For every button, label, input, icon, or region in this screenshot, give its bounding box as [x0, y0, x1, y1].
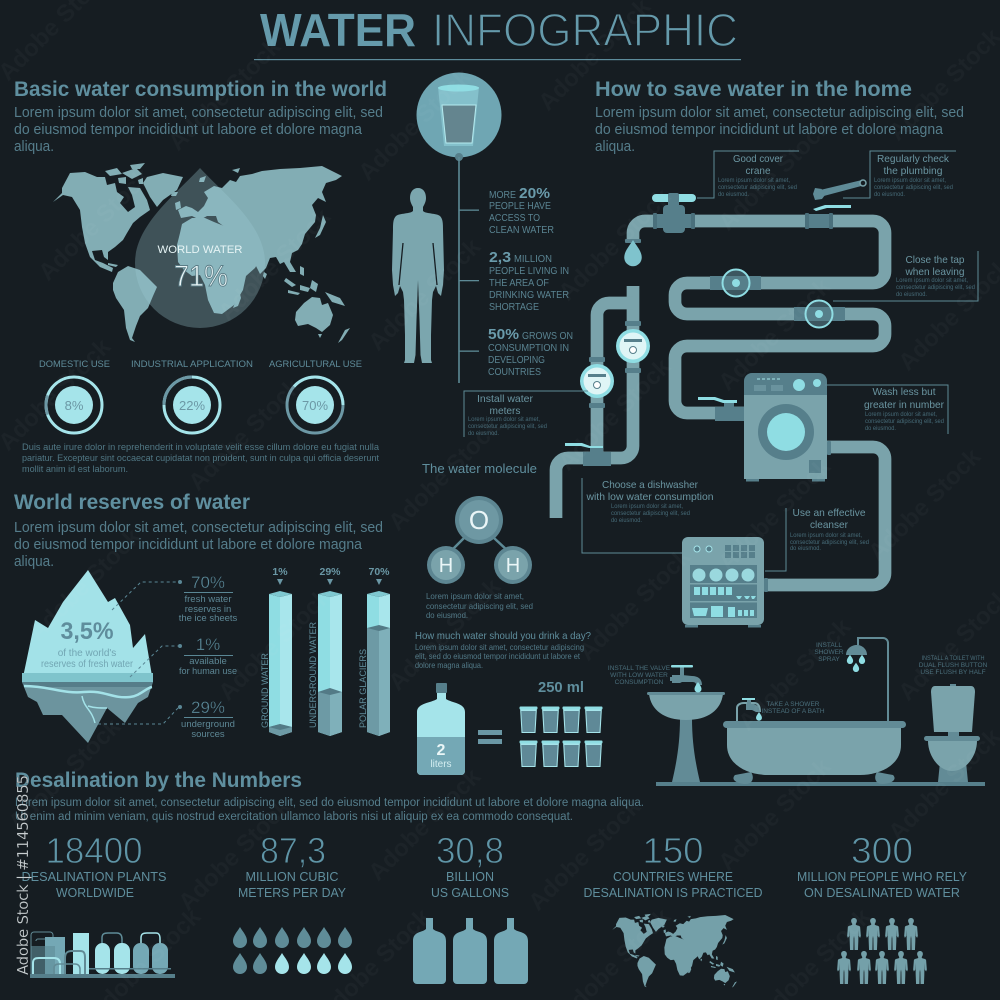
watermark: stock pattern: Adobe Stock [733, 613, 857, 736]
text block: world reserves intro: Lorem ipsum dolor sit amet, consectetur adipiscing elit, sed [14, 519, 383, 536]
icon: water drop from tap [624, 240, 642, 266]
stat: 87,3 million cubic: METERS PER DAY [238, 885, 346, 900]
icon: lower left valve [565, 443, 611, 466]
text: install shower spray: SPRAY [818, 656, 840, 663]
stat: more 20%: ACCESS TO [489, 213, 540, 224]
icon: desalination plant [30, 932, 175, 978]
text: install toilet [919, 655, 988, 676]
callout: use effective cleanser: do eiusmod. [790, 545, 821, 552]
callout: choose dishwasher: Lorem ipsum dolor sit amet, [611, 503, 683, 510]
stat: 2,3 million [489, 249, 569, 313]
gauge: domestic 8% [46, 377, 102, 433]
stat: 50% grows: COUNTRIES [488, 367, 541, 378]
text block: desalination intro [15, 797, 644, 823]
stat: 87,3 million cubic: MILLION CUBIC [246, 869, 338, 884]
stat: 70% ice sheets: reserves in [185, 604, 231, 615]
watermark: stock pattern: Adobe Stock [183, 373, 307, 496]
text block: molecule [426, 591, 533, 620]
watermark: stock pattern: Adobe Stock [3, 713, 127, 836]
watermark: stock pattern: Adobe Stock [23, 523, 147, 646]
world map with water drop [53, 163, 350, 343]
stat: 2,3 million: SHORTAGE [489, 302, 539, 313]
text: take a shower: INSTEAD OF A BATH [761, 708, 825, 715]
callout: good cover crane: do eiusmod. [718, 191, 749, 198]
stat: 18400 plants: 18400 [46, 830, 142, 871]
stat: 150 countries: 150 [642, 830, 704, 871]
watermark: stock pattern: Adobe Stock [163, 33, 287, 156]
icon: 2 liters bottle: liters [430, 759, 452, 770]
watermark: stock pattern: Adobe Stock [363, 763, 487, 886]
text block: duis aute [22, 442, 380, 475]
stat: 1% human use [179, 635, 237, 677]
stat: 2,3 million: 2,3 [489, 249, 511, 266]
heading: water molecule: The water molecule [422, 461, 537, 476]
text block: world reserves intro: do eiusmod tempor incididunt ut labore et dolore magna [14, 536, 363, 553]
watermark: stock pattern: Adobe Stock [383, 413, 507, 536]
icon: 2 liters bottle: 2 [437, 742, 446, 759]
stat: 70% ice sheets [179, 573, 238, 624]
watermark: stock pattern: Adobe Stock [713, 113, 837, 236]
stat: 300 million people: ON DESALINATED WATER [804, 885, 960, 900]
text block: molecule: Lorem ipsum dolor sit amet, [426, 591, 524, 601]
bar: polar glaciers: POLAR GLACIERS [358, 649, 369, 728]
text block: save water intro [595, 104, 964, 155]
callout: wash less [825, 385, 948, 434]
bathroom: floor [656, 782, 985, 786]
callout: regularly check plumbing: the plumbing [884, 165, 943, 177]
bar: ground water: 1% [272, 566, 288, 578]
icon: dishwasher [682, 537, 768, 628]
icon: small world map [612, 914, 737, 988]
stat: 18400 plants: DESALINATION PLANTS [22, 869, 167, 884]
stat: 2,3 million: DRINKING WATER [489, 290, 569, 301]
text block: basic water intro [14, 104, 383, 155]
text block: basic water intro: do eiusmod tempor incididunt ut labore et dolore magna [14, 121, 363, 138]
text: install shower spray: SHOWER [814, 649, 844, 656]
callout: close the tap: when leaving [905, 266, 965, 278]
callout: choose dishwasher: Choose a dishwasher [602, 479, 698, 491]
stat: more 20%: CLEAN WATER [489, 225, 554, 236]
stat: 150 countries [584, 830, 762, 900]
stat: 87,3 million cubic [238, 830, 346, 900]
icon: crane valve [652, 193, 696, 233]
text: install valve: CONSUMPTION [615, 679, 664, 686]
callout: good cover crane: crane [746, 165, 771, 177]
callout: regularly check plumbing: Regularly check [877, 153, 950, 165]
callout: wash less: Wash less but [872, 386, 936, 398]
icon: water meter upper [616, 321, 650, 373]
callout: good cover crane: Good cover [733, 153, 783, 165]
callout: install water meters: consectetur adipiscing elit, sed [468, 423, 547, 430]
icon: twelve drops [233, 927, 352, 974]
title [254, 4, 741, 60]
callout: regularly check plumbing: do eiusmod. [874, 191, 905, 198]
bar: ground water [260, 566, 292, 736]
stat: 150 countries: COUNTRIES WHERE [613, 869, 733, 884]
stat: 50% grows: CONSUMPTION IN [488, 343, 569, 354]
text block: how much water: Lorem ipsum dolor sit amet, consectetur adipiscing [415, 642, 584, 652]
icon: people group [837, 918, 927, 984]
text block: molecule: do eiusmod. [426, 610, 468, 620]
callout: close the tap: Close the tap [906, 254, 965, 266]
iceberg: 3,5% [60, 618, 114, 645]
icon: bathtub with shower [723, 638, 906, 784]
text: install valve [608, 665, 671, 686]
stat: more 20%: MORE [489, 190, 516, 201]
callout: wash less: do eiusmod. [865, 425, 896, 432]
pipe system: meter branch [556, 286, 633, 518]
stat: 87,3 million cubic: 87,3 [260, 830, 326, 871]
diagram: water molecule: H [439, 555, 453, 577]
text: take a shower [761, 701, 825, 715]
watermark: stock pattern: Adobe Stock [573, 543, 697, 666]
text: install shower spray: INSTALL [816, 642, 842, 649]
gauge: industrial 22% [164, 377, 220, 433]
stat: 29% underground: 29% [191, 698, 225, 717]
icon: eight glasses [520, 706, 602, 767]
stat: 70% ice sheets: fresh water [184, 594, 232, 605]
watermark: stock pattern: Adobe Stock [713, 453, 837, 576]
watermark: stock pattern: Adobe Stock [363, 233, 487, 356]
heading: basic water consumption: Basic water consumption in the world [14, 78, 387, 101]
callout: choose dishwasher: do eiusmod. [611, 517, 642, 524]
text: install shower spray [814, 642, 844, 663]
bar: underground water: UNDERGROUND WATER [308, 622, 319, 728]
stat: 300 million people [797, 830, 967, 900]
stat: more 20% [489, 185, 554, 236]
text: install toilet: USE FLUSH BY HALF [920, 669, 986, 676]
callout: install water meters: do eiusmod. [468, 430, 499, 437]
callout: use effective cleanser: cleanser [810, 519, 848, 531]
callout: close the tap [833, 251, 978, 301]
gauge: industrial 22%: 22% [179, 398, 205, 413]
text block: world reserves intro [14, 519, 383, 570]
stat: 18400 plants [22, 830, 167, 900]
text block: duis aute: mollit anim id est laborum. [22, 464, 128, 475]
iceberg: of the world's [58, 648, 116, 659]
world map with water drop: 71% [174, 260, 228, 293]
callout: regularly check plumbing: consectetur adipiscing elit, sed [874, 184, 953, 191]
stat: 2,3 million: THE AREA OF [489, 278, 549, 289]
gauge: agricultural 70%: 70% [302, 398, 328, 413]
icon: water meter lower [580, 357, 614, 408]
stat: 29% underground: underground [181, 719, 235, 730]
callout: use effective cleanser: Use an effective [792, 507, 866, 519]
heading: desalination: Desalination by the Numbers [15, 769, 302, 792]
callout: install water meters: Lorem ipsum dolor sit amet, [468, 416, 540, 423]
icon: washing machine [744, 373, 831, 482]
pipe system: main run [625, 221, 885, 585]
world map with water drop: WORLD WATER [158, 244, 243, 256]
iceberg: reserves of fresh water [41, 659, 134, 670]
stat: more 20%: PEOPLE HAVE [489, 201, 551, 212]
stat: 70% ice sheets: 70% [191, 573, 225, 592]
gauge: domestic 8%: 8% [65, 398, 84, 413]
diagram: water molecule [427, 496, 532, 584]
stat: 1% human use: 1% [196, 635, 220, 654]
watermark: stock pattern: Adobe Stock [353, 63, 477, 186]
watermark: stock pattern: Adobe Stock [33, 163, 157, 286]
callout: close the tap: Lorem ipsum dolor sit amet, [896, 277, 968, 284]
text: install valve: INSTALL THE VALVE [608, 665, 671, 672]
title: WATER [260, 4, 416, 56]
callout: choose dishwasher: with low water consumption [586, 491, 714, 503]
text: install toilet: INSTALL A TOILET WITH [922, 655, 985, 662]
watermark: stock pattern: Adobe Stock [553, 183, 677, 306]
text block: desalination intro: Ut enim ad minim veniam, quis nostrud exercitation ullamco laboris nisi ut aliquip ex ea commodo consequat. [15, 811, 573, 823]
watermark: stock pattern: Adobe Stock [713, 753, 837, 876]
bar: underground water: 29% [319, 566, 341, 578]
callout: use effective cleanser: Lorem ipsum dolor sit amet, [790, 532, 862, 539]
text block: save water intro: do eiusmod tempor incididunt ut labore et dolore magna [595, 121, 944, 138]
usage gauge labels: AGRICULTURAL USE [269, 359, 362, 370]
label: 250 ml: 250 ml [538, 679, 584, 696]
stat: 300 million people: MILLION PEOPLE WHO RELY [797, 869, 967, 884]
heading: how much water: How much water should you drink a day? [415, 630, 591, 642]
text block: basic water intro: Lorem ipsum dolor sit amet, consectetur adipiscing elit, sed [14, 104, 383, 121]
heading: world reserves: World reserves of water [14, 491, 250, 514]
stat: 50% grows: GROWS ON [522, 331, 573, 342]
callout: good cover crane: Lorem ipsum dolor sit amet, [718, 177, 790, 184]
stat: 30,8 billion: 30,8 [436, 830, 504, 871]
stat: 70% ice sheets: the ice sheets [179, 613, 238, 624]
text: take a shower: TAKE A SHOWER [767, 701, 820, 708]
callout: close the tap: consectetur adipiscing elit, sed [896, 284, 975, 291]
stat: 50% grows [488, 326, 573, 378]
callout: install water meters: Install water [477, 393, 533, 405]
gauge: agricultural 70% [287, 377, 343, 433]
usage gauge labels: INDUSTRIAL APPLICATION [131, 359, 253, 370]
text block: duis aute: Duis aute irure dolor in reprehenderit in voluptate velit esse cillum dolore eu fugiat nulla [22, 442, 380, 453]
watermark: stock pattern: Adobe Stock [713, 273, 837, 396]
bar: underground water [308, 566, 342, 736]
text block: save water intro: aliqua. [595, 138, 635, 155]
watermark: stock pattern: Adobe Stock [863, 443, 987, 566]
callout: wash less: greater in number [864, 399, 944, 411]
text block: how much water [415, 642, 584, 670]
icon: three bottles [413, 918, 528, 984]
watermark: stock pattern: Adobe Stock [213, 583, 337, 706]
stat: 30,8 billion: BILLION [446, 869, 494, 884]
bar: polar glaciers [358, 566, 390, 736]
icon: human silhouette [392, 188, 444, 363]
text block: how much water: elit, sed do eiusmod tempor incididunt ut labore et [415, 651, 581, 661]
icon: glass in circle with stem [416, 72, 502, 383]
diagram: water molecule: O [469, 505, 489, 535]
stat: 29% underground [181, 698, 235, 740]
stat: 1% human use: for human use [179, 666, 237, 677]
watermark: stock pattern: Adobe Stock [213, 203, 337, 326]
callout: regularly check plumbing: Lorem ipsum dolor sit amet, [874, 177, 946, 184]
icon: sink [647, 665, 725, 782]
callout: close the tap: do eiusmod. [896, 291, 927, 298]
callout: regularly check plumbing [843, 151, 956, 198]
callout: install water meters: meters [490, 405, 520, 417]
callout: use effective cleanser: consectetur adipiscing elit, sed [790, 539, 869, 546]
stat: 30,8 billion: US GALLONS [431, 885, 509, 900]
stat: 50% grows: DEVELOPING [488, 355, 545, 366]
text block: desalination intro: Lorem ipsum dolor sit amet, consectetur adipiscing elit, sed do eiusmod tempor incididunt ut labore et dolore magna aliqua. [15, 797, 644, 809]
text block: world reserves intro: aliqua. [14, 553, 54, 570]
stat: more 20%: 20% [519, 185, 550, 202]
callout: use effective cleanser [765, 507, 869, 571]
callout: wash less: consectetur adipiscing elit, sed [865, 418, 944, 425]
title: INFOGRAPHIC [432, 4, 738, 56]
text: install toilet: DUAL FLUSH BUTTON [919, 662, 988, 669]
heading: how to save water: How to save water in the home [595, 78, 912, 101]
callout: good cover crane: consectetur adipiscing elit, sed [718, 184, 797, 191]
callout: good cover crane [697, 151, 799, 198]
callout: install water meters [464, 391, 588, 437]
usage gauge labels: DOMESTIC USE [39, 359, 110, 370]
stat: 30,8 billion [431, 830, 509, 900]
text block: basic water intro: aliqua. [14, 138, 54, 155]
watermark: side id strip: Adobe Stock | #114560855 [14, 775, 32, 975]
icon: toilet [924, 684, 980, 782]
text block: molecule: consectetur adipiscing elit, sed [426, 601, 533, 611]
text block: save water intro: Lorem ipsum dolor sit amet, consectetur adipiscing elit, sed [595, 104, 964, 121]
text block: how much water: dolore magna aliqua. [415, 660, 483, 670]
stat: 1% human use: available [189, 656, 227, 667]
watermark: stock pattern: Adobe Stock [383, 573, 507, 696]
stat: 50% grows: 50% [488, 326, 519, 343]
icon: wrench and plumbing valve [805, 180, 866, 229]
watermark: stock pattern: Adobe Stock [553, 353, 677, 476]
stat: 2,3 million: PEOPLE LIVING IN [489, 266, 569, 277]
watermark: stock pattern: Adobe Stock [173, 793, 297, 916]
bar: ground water: GROUND WATER [260, 653, 271, 728]
watermark: stock pattern: Adobe Stock [523, 793, 647, 916]
stat: 150 countries: DESALINATION IS PRACTICED [584, 885, 762, 900]
iceberg leader lines [98, 580, 182, 724]
stat: 300 million people: 300 [851, 830, 913, 871]
icon: hand wheel valve one [710, 270, 761, 296]
callout: wash less: Lorem ipsum dolor sit amet, [865, 411, 937, 418]
diagram: water molecule: H [506, 555, 520, 577]
stat: 18400 plants: WORLDWIDE [56, 885, 134, 900]
icon: hand wheel valve two [794, 300, 845, 328]
iceberg [22, 570, 153, 743]
icon: 2 liters bottle [417, 683, 465, 775]
bar: polar glaciers: 70% [368, 566, 390, 578]
equals sign [478, 730, 502, 744]
stat: 29% underground: sources [191, 729, 225, 740]
stat: 2,3 million: MILLION [514, 254, 552, 265]
text block: duis aute: pariatur. Excepteur sint occaecat cupidatat non proident, sunt in culpa qui officia deserunt [22, 453, 379, 464]
callout: choose dishwasher: consectetur adipiscing elit, sed [611, 510, 690, 517]
usage gauge labels [39, 359, 362, 370]
callout: choose dishwasher [582, 478, 714, 553]
text: install valve: WITH LOW WATER [610, 672, 668, 679]
icon: washer inlet valve [698, 397, 744, 421]
